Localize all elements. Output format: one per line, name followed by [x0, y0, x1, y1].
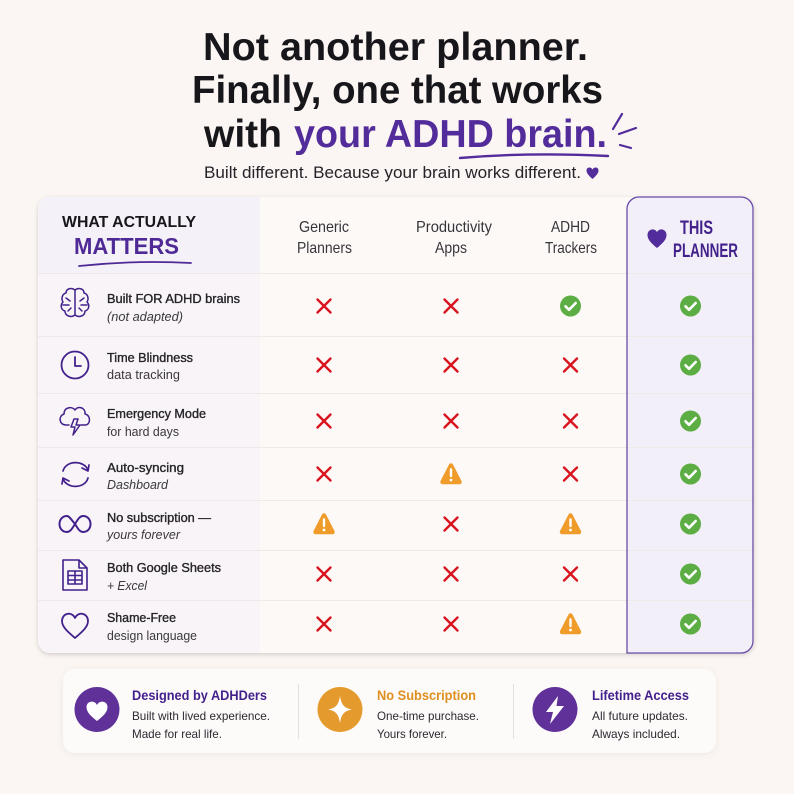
- icon: brain: [61, 289, 89, 316]
- highlighted column fill: [627, 197, 753, 653]
- row: both google sheets: + Excel: [107, 579, 148, 593]
- title: Not another planner.: [203, 26, 588, 69]
- column heading: generic planners: [297, 219, 352, 257]
- icon: sync arrows: [62, 463, 89, 486]
- benefit: no subscription: Yours forever.: [377, 727, 447, 741]
- icon: heart: [62, 614, 88, 638]
- row: time blindness: Time Blindness: [107, 351, 193, 365]
- column heading: adhd trackers: ADHD: [551, 219, 590, 236]
- row: no subscription: yours forever: [106, 528, 181, 542]
- row: no subscription: [60, 511, 701, 542]
- title: with: [203, 113, 282, 156]
- benefit: lifetime access: Lifetime Access: [592, 687, 689, 703]
- column heading: this planner: PLANNER: [673, 241, 738, 262]
- icon: clock: [62, 352, 88, 378]
- row: emergency mode: [60, 407, 701, 439]
- row: both google sheets: Both Google Sheets: [107, 561, 221, 575]
- row: shame-free: Shame-Free: [107, 611, 176, 625]
- row: both google sheets: [63, 560, 701, 593]
- title: [192, 26, 636, 158]
- icon: spreadsheet: [63, 560, 87, 590]
- highlighted column border: [627, 197, 753, 653]
- row: emergency mode: Emergency Mode: [107, 407, 206, 421]
- benefit: lifetime access: Always included.: [592, 727, 680, 741]
- column heading: this planner: THIS: [680, 218, 713, 239]
- panel: comparison table: [38, 197, 754, 653]
- row: auto-syncing: [62, 461, 701, 492]
- row: built for adhd brains: [61, 289, 701, 324]
- column heading: productivity apps: Productivity: [416, 219, 492, 236]
- row: emergency mode: for hard days: [107, 425, 179, 439]
- title: Finally, one that works: [192, 69, 603, 112]
- column heading: adhd trackers: [545, 219, 597, 257]
- benefit: designed by adhders: Designed by ADHDers: [132, 687, 267, 703]
- column heading: adhd trackers: Trackers: [545, 240, 597, 257]
- row: no subscription: No subscription —: [107, 511, 212, 525]
- row: time blindness: [62, 351, 701, 382]
- row: auto-syncing: Dashboard: [107, 478, 169, 492]
- emphasis marks: [613, 114, 636, 148]
- heading: what actually matters: WHAT ACTUALLY: [62, 214, 196, 231]
- heading: what actually matters: MATTERS: [74, 233, 179, 259]
- row: shame-free: [62, 611, 701, 643]
- row: built for adhd brains: (not adapted): [107, 310, 183, 324]
- title: your ADHD brain.: [294, 113, 607, 156]
- benefit: no subscription: One-time purchase.: [377, 709, 479, 723]
- benefit: designed by adhders: Made for real life.: [132, 727, 222, 741]
- icon: small heart: [586, 168, 598, 179]
- column heading: this planner: [648, 218, 738, 262]
- column heading: generic planners: Planners: [297, 240, 352, 257]
- benefit: designed by adhders: Built with lived experience.: [132, 709, 270, 723]
- underline: brain: [460, 154, 608, 158]
- icon: infinity: [60, 516, 90, 532]
- row: time blindness: data tracking: [107, 368, 180, 382]
- benefit: designed by adhders: [74, 687, 270, 741]
- row: built for adhd brains: Built FOR ADHD brains: [107, 292, 240, 306]
- column heading: productivity apps: Apps: [435, 240, 467, 257]
- benefit: lifetime access: All future updates.: [592, 709, 688, 723]
- panel: benefits strip: [63, 669, 716, 753]
- heading: what actually matters: [62, 214, 196, 266]
- row: auto-syncing: Auto-syncing: [107, 461, 184, 475]
- subtitle: Built different. Because your brain works different.: [204, 163, 581, 182]
- row: shame-free: design language: [107, 629, 197, 643]
- benefit: no subscription: [318, 687, 479, 741]
- benefit: lifetime access: [532, 687, 689, 741]
- benefit: no subscription: No Subscription: [377, 687, 476, 703]
- column heading: generic planners: Generic: [299, 219, 349, 236]
- first column tint: [38, 197, 260, 653]
- icon: cloud with bolt: [60, 407, 90, 435]
- column heading: productivity apps: [416, 219, 492, 257]
